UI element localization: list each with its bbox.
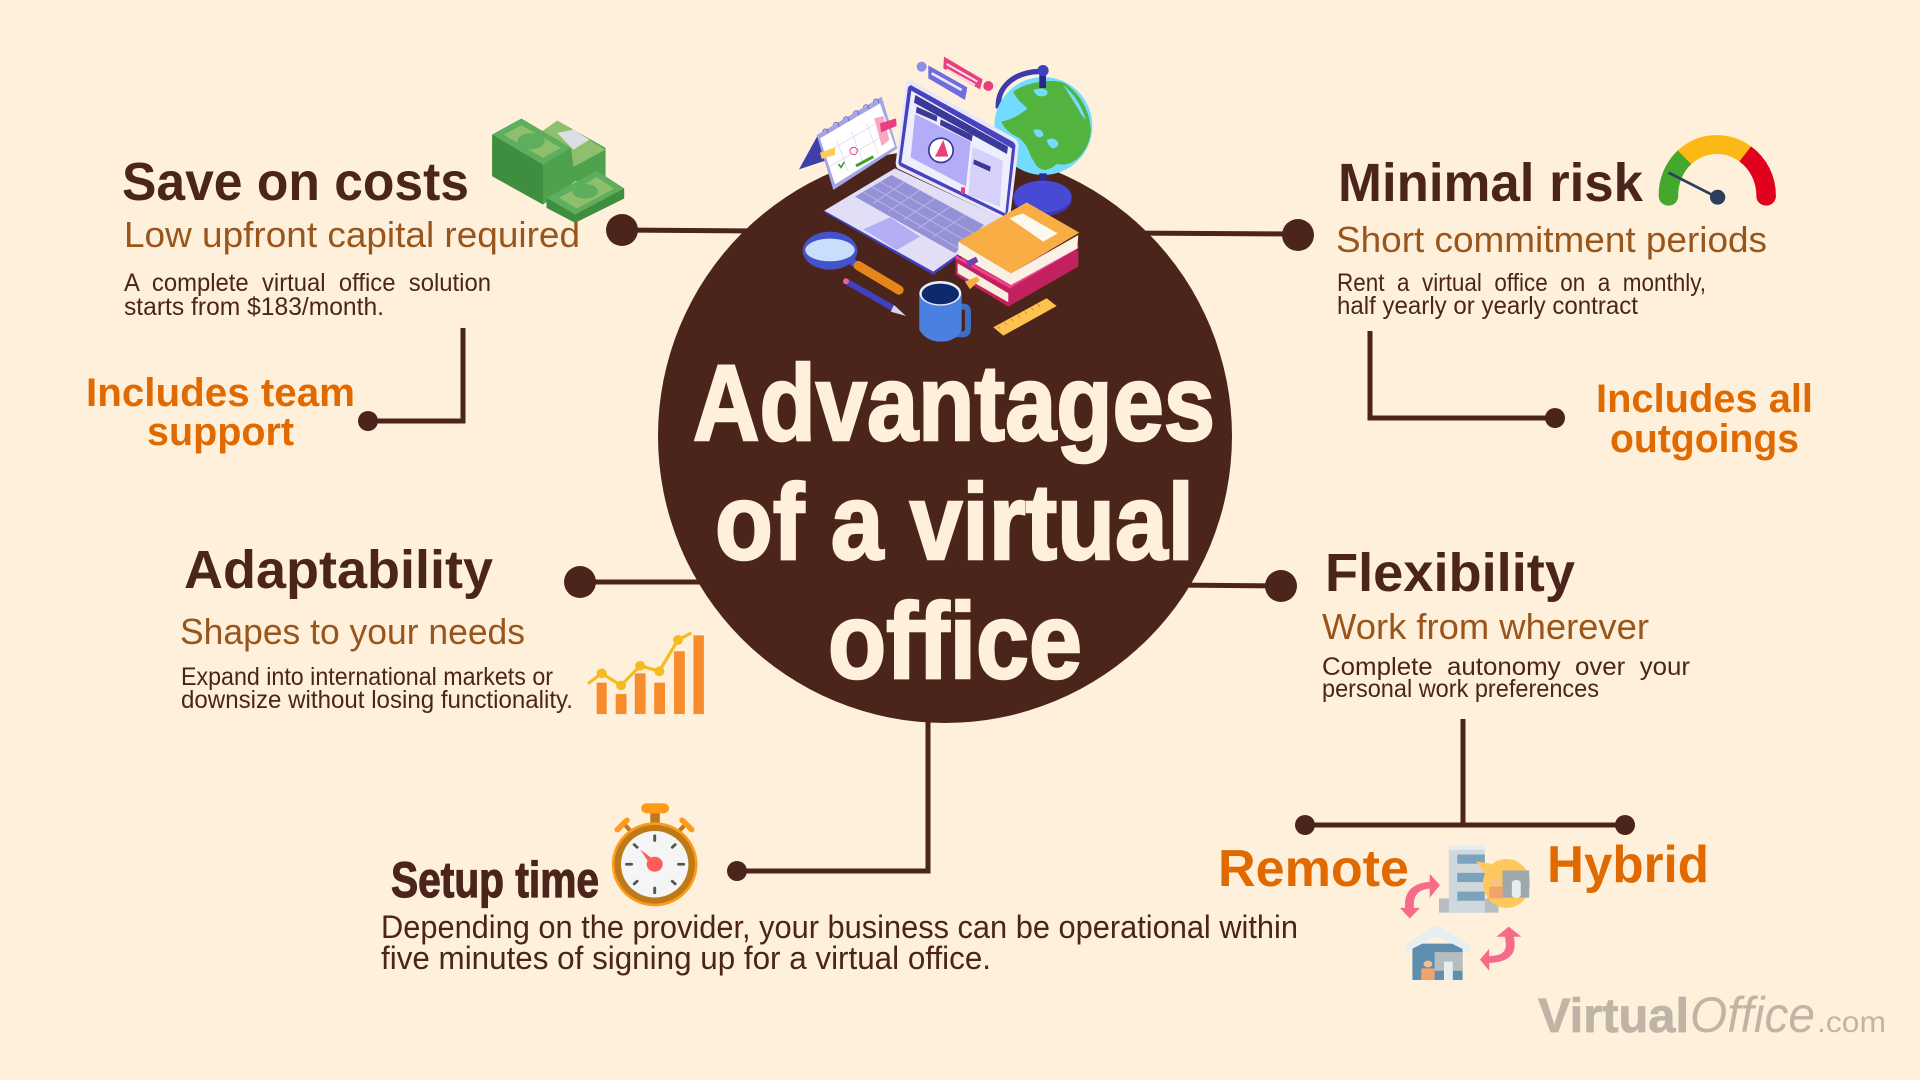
callout: includes team support — [86, 371, 355, 454]
connector: save on costs — [606, 214, 760, 246]
callout: includes team support: support — [147, 410, 294, 454]
panel: minimal risk — [1336, 153, 1767, 320]
logo: VirtualOffice.com: Virtual — [1538, 990, 1689, 1043]
calendar — [799, 97, 897, 190]
icon: risk gauge — [1668, 145, 1766, 205]
body text: Rent a virtual office on a monthly, — [1337, 269, 1706, 297]
body text: Expand into international markets or — [181, 663, 553, 691]
heading: Save on costs — [122, 152, 469, 212]
connector: includes team support — [358, 328, 463, 431]
title: of a virtual — [715, 461, 1194, 582]
icon: office and home cycle — [1400, 845, 1530, 980]
icon: stopwatch — [612, 803, 698, 906]
heading: Adaptability — [184, 540, 493, 600]
body text: personal work preferences — [1322, 675, 1599, 703]
speech bubble — [1476, 859, 1530, 908]
body text — [124, 269, 491, 321]
panel: flexibility — [1322, 543, 1690, 703]
body text: Complete autonomy over your — [1322, 653, 1690, 681]
callout: includes all outgoings: Includes all — [1596, 377, 1813, 421]
connector: adaptability — [564, 566, 720, 598]
connector: remote and hybrid — [1295, 719, 1635, 835]
chat bubbles — [917, 57, 993, 100]
laptop — [823, 79, 1019, 275]
body text: starts from $183/month. — [124, 293, 384, 321]
logo: VirtualOffice.com: .com — [1817, 1006, 1886, 1039]
office building — [1439, 845, 1499, 913]
heading: Setup time — [391, 852, 599, 908]
body text: half yearly or yearly contract — [1337, 292, 1638, 320]
connector: setup time — [727, 715, 928, 881]
icon: stack of money — [492, 119, 624, 223]
panel: adaptability — [180, 540, 573, 714]
body text: five minutes of signing up for a virtual office. — [381, 940, 991, 976]
magnifier — [803, 232, 899, 290]
connector: minimal risk — [1130, 219, 1314, 251]
title: Advantages — [693, 342, 1215, 463]
body text — [1337, 269, 1706, 320]
callout: includes all outgoings — [1596, 377, 1813, 461]
body text: Depending on the provider, your business can be operational within — [381, 909, 1298, 945]
connector: includes all outgoings — [1370, 331, 1565, 428]
books — [956, 202, 1079, 307]
mug — [919, 281, 968, 342]
panel: save on costs — [122, 152, 580, 321]
globe — [994, 65, 1092, 216]
pencil — [843, 278, 906, 316]
arrow: to home — [1480, 927, 1521, 971]
home — [1406, 925, 1469, 980]
title: office — [828, 580, 1082, 701]
body text: A complete virtual office solution — [124, 269, 491, 297]
subheading: Work from wherever — [1322, 606, 1649, 647]
heading: Flexibility — [1325, 543, 1575, 603]
panel: setup time — [381, 852, 1298, 976]
subheading: Shapes to your needs — [180, 611, 525, 652]
ruler — [993, 298, 1057, 336]
label: hybrid: Hybrid — [1547, 836, 1709, 894]
subheading: Low upfront capital required — [124, 214, 580, 255]
logo: VirtualOffice.com — [1538, 987, 1886, 1043]
logo: VirtualOffice.com: Office — [1690, 987, 1815, 1043]
icon: growth chart — [588, 633, 704, 714]
heading: Minimal risk — [1338, 153, 1644, 213]
arrow: to office — [1400, 874, 1440, 918]
connector: flexibility — [1170, 570, 1297, 602]
label: remote: Remote — [1218, 840, 1409, 898]
body text — [1322, 653, 1690, 703]
body text: downsize without losing functionality. — [181, 686, 573, 714]
body text — [381, 909, 1298, 976]
central circle — [658, 149, 1232, 723]
title — [693, 342, 1215, 701]
icon: desk illustration — [799, 57, 1092, 342]
body text — [181, 663, 573, 714]
callout: includes all outgoings: outgoings — [1610, 417, 1799, 461]
subheading: Short commitment periods — [1336, 219, 1767, 260]
callout: includes team support: Includes team — [86, 371, 355, 415]
